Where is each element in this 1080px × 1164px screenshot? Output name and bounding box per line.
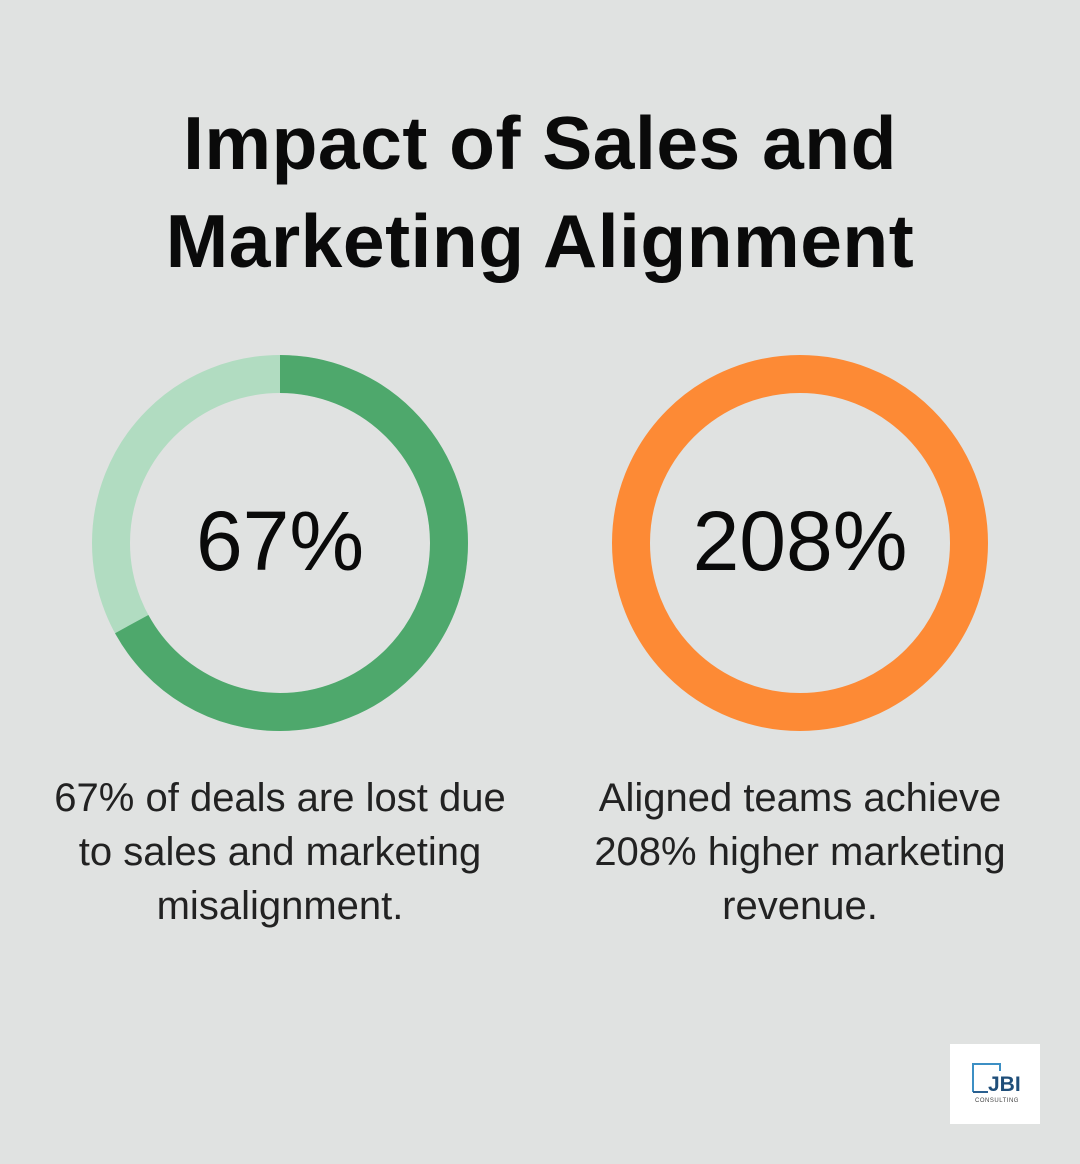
title: Impact of Sales and [183, 101, 897, 185]
text: right description: Aligned teams achieve [599, 776, 1001, 820]
text: right description [594, 776, 1006, 928]
text: left description [54, 776, 506, 928]
logo: JBI [988, 1073, 1021, 1096]
title: Marketing Alignment [166, 199, 914, 283]
donut: 67% [111, 374, 449, 712]
text: right description: revenue. [722, 884, 878, 928]
text: right description: 208% higher marketing [594, 830, 1006, 874]
text: left description: to sales and marketing [79, 830, 481, 874]
text: left description: misalignment. [157, 884, 403, 928]
logo: CONSULTING [975, 1098, 1019, 1104]
text: left description: 67% of deals are lost due [54, 776, 506, 820]
title [166, 101, 914, 283]
logo [950, 1044, 1040, 1124]
donut: 208%: 208% [693, 494, 907, 588]
donut: 208% [631, 374, 969, 712]
donut: 67%: 67% [196, 494, 364, 588]
